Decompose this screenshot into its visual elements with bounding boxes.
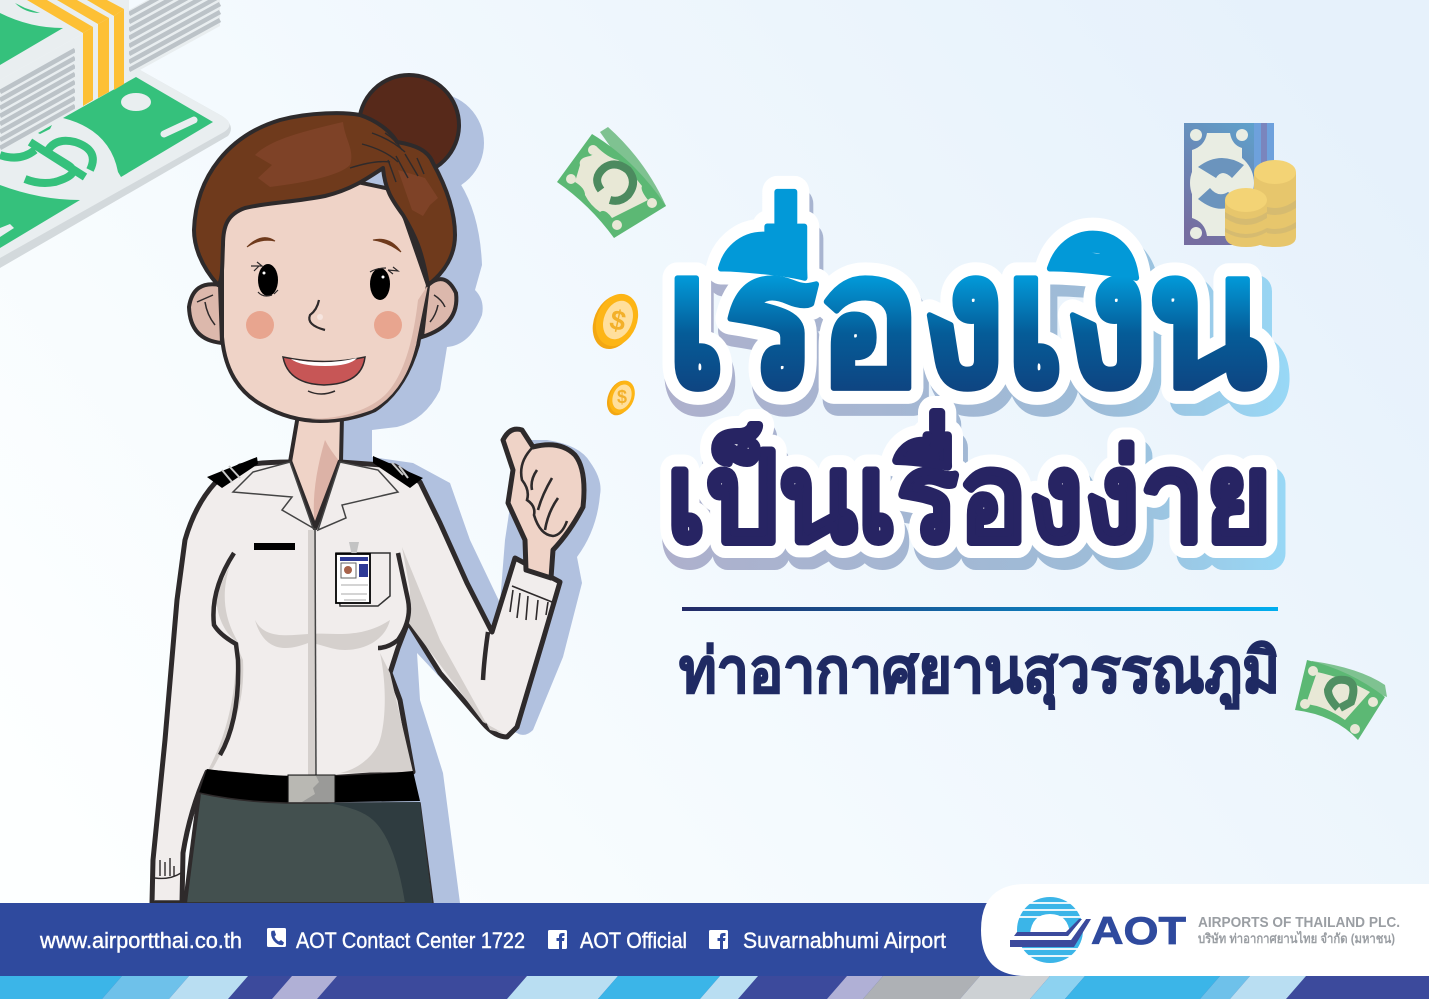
logo emblem [1010, 897, 1091, 963]
illustration: green banknote lower [1295, 660, 1387, 740]
sleeve cuff [510, 586, 552, 620]
illustration: green banknote upper [557, 127, 666, 238]
title line 1 outline: เรื่องเงิน [666, 191, 1266, 425]
hair strands [350, 133, 424, 182]
right ear [422, 279, 456, 337]
title line 1 fill: เรื่องเงิน [666, 191, 1266, 425]
mouth [283, 357, 365, 385]
bust and arm outlines [213, 553, 488, 755]
character: airport staff woman giving thumbs up [152, 75, 601, 903]
illustration: gold coin large [585, 287, 646, 355]
neck [290, 415, 342, 530]
contact center text: AOT Contact Center 1722 [296, 928, 525, 953]
AOT logo [1010, 897, 1400, 963]
belt buckle [288, 775, 335, 803]
bundle top and side with strap [0, 0, 220, 150]
shirt pocket [336, 553, 390, 606]
eyebrows [247, 238, 401, 252]
left eye [258, 264, 278, 296]
icon: facebook 2 [709, 930, 728, 949]
logo wordmark: AOT [1091, 910, 1186, 953]
cheeks [246, 311, 274, 339]
subtitle: ท่าอากาศยานสุวรรณภูมิ [679, 637, 1280, 709]
nose [309, 300, 325, 330]
thumbs up hand [503, 429, 584, 578]
banknote lying flat [0, 70, 231, 268]
shirt placket line [315, 528, 316, 775]
hair bun [359, 75, 459, 175]
name tag [254, 543, 295, 550]
title line 2 shadow: เป็นเรื่องง่าย [668, 422, 1280, 580]
right collar [318, 462, 398, 530]
belt [199, 769, 420, 803]
left hand cuff [155, 858, 183, 901]
icon: facebook 1 [548, 930, 567, 949]
skirt [185, 793, 433, 903]
hair [194, 113, 455, 285]
illustration: stack of banknotes [0, 0, 231, 268]
title line 1 [666, 191, 1276, 437]
AOT Official text: AOT Official [580, 928, 687, 953]
title line 1 shadow: เรื่องเงิน [668, 203, 1276, 437]
face [222, 170, 428, 421]
website address: www.airportthai.co.th [39, 928, 242, 953]
ear details [197, 295, 445, 325]
illustration: gold coin small [602, 377, 639, 419]
coin stack left [1225, 188, 1267, 247]
left epaulette [207, 457, 258, 488]
right eye [370, 268, 390, 300]
icon: phone [267, 928, 286, 947]
footer striped band [0, 976, 1429, 999]
right epaulette [373, 456, 423, 488]
company name English: AIRPORTS OF THAILAND PLC. [1198, 914, 1400, 931]
logo panel [981, 884, 1429, 976]
shirt body and sleeves [152, 462, 560, 903]
staff ID card [336, 542, 370, 603]
company name Thai: บริษัท ท่าอากาศยานไทย จำกัด (มหาชน) [1198, 930, 1395, 946]
illustration: gold coin small: $ [617, 387, 627, 407]
shirt shading [207, 530, 503, 775]
title line 2 outline: เป็นเรื่องง่าย [666, 410, 1272, 568]
title line 2 fill: เป็นเรื่องง่าย [666, 410, 1272, 568]
coin stack right [1254, 160, 1296, 247]
title line 2 [666, 410, 1280, 580]
footer contact bar [0, 903, 1035, 976]
fingers [521, 447, 567, 536]
hair highlight [255, 122, 351, 187]
character blue offset shadow [300, 93, 601, 903]
left ear [189, 284, 222, 343]
illustration: gold coin large: $ [607, 304, 629, 337]
eye highlights and lashes [251, 262, 398, 296]
divider rule [682, 607, 1278, 611]
Suvarnabhumi Airport text: Suvarnabhumi Airport [743, 928, 946, 953]
illustration: banknote with coin stacks [1184, 123, 1296, 247]
left collar [233, 462, 313, 528]
